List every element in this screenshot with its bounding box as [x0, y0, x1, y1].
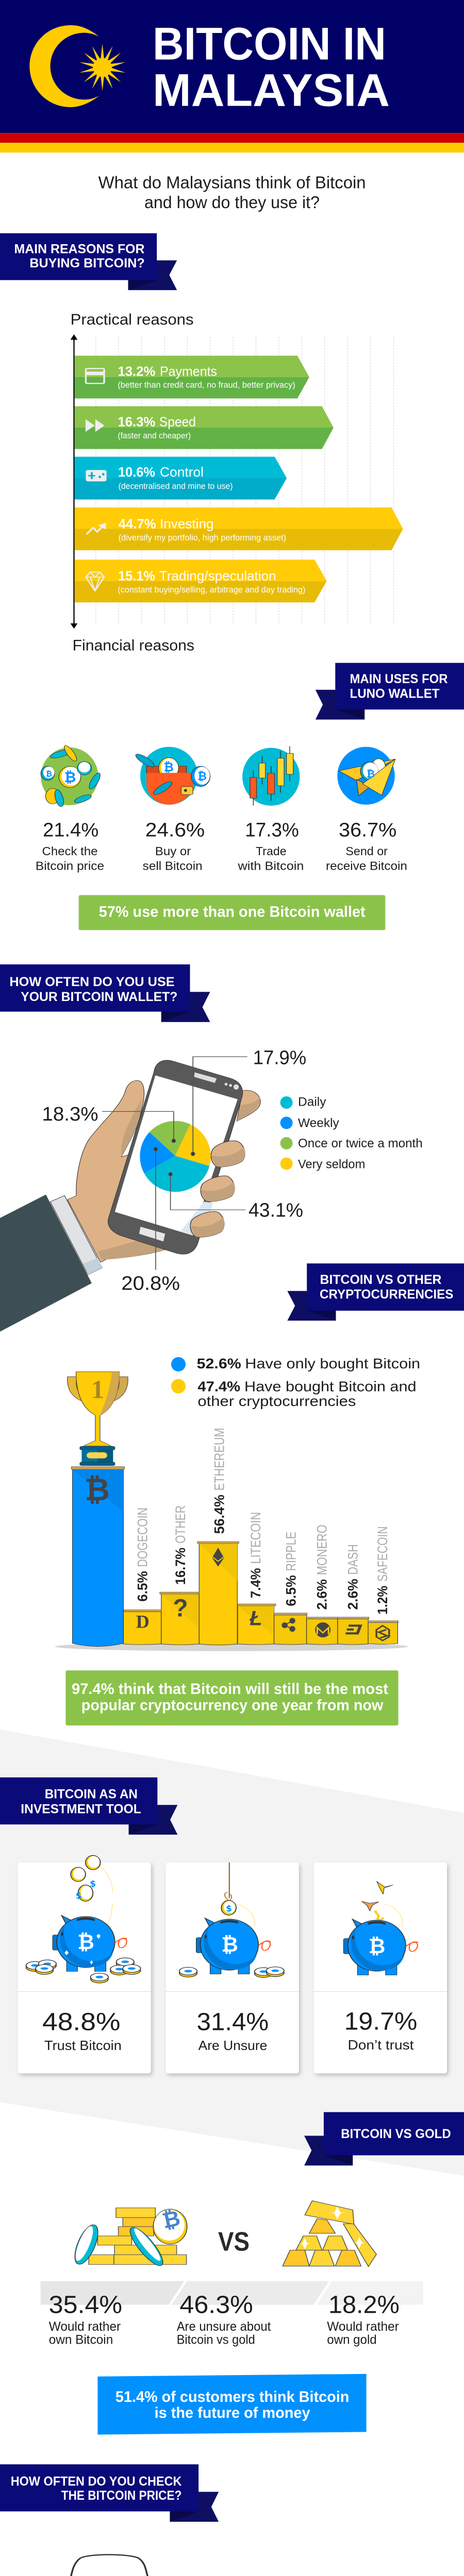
bar chart: coin podium: [55, 1467, 408, 1651]
legend: [280, 1095, 423, 1171]
column labels: [135, 1428, 390, 1615]
stat: 36.7% send or receive: receive Bitcoin: [326, 859, 407, 872]
legend: Have bought Bitcoin and: [244, 1379, 417, 1395]
stat: 18.2% gold: Would rather: [327, 2319, 399, 2334]
text: speed: 16.3%: [118, 414, 155, 430]
stat: 35.4% bitcoin: 35.4%: [49, 2292, 122, 2318]
pie chart: wallet frequency: [140, 1121, 211, 1192]
text: payments: 13.2%: [118, 364, 155, 379]
stat: 24.6% buy or sell: sell Bitcoin: [143, 859, 203, 872]
column labels: DOGECOIN: [135, 1507, 150, 1567]
callout: 97.4% most popular: popular cryptocurrency one year from now: [81, 1697, 384, 1714]
stat: 18.2% gold: 18.2%: [328, 2292, 400, 2318]
icon: fast forward: [86, 419, 105, 432]
value: 17.9%: 17.9%: [253, 1047, 306, 1069]
label: VS: VS: [218, 2227, 250, 2257]
stat: 36.7% send or receive: [326, 819, 407, 872]
column labels: 2.6%: [345, 1579, 360, 1609]
callout: 97.4% most popular: [65, 1670, 399, 1725]
text: speed: [118, 414, 196, 440]
illustration: gold bars and bitcoin coins: ₿: [160, 2205, 183, 2233]
text: payments: [118, 364, 295, 389]
icon: bitcoin symbol on bar: ₿: [85, 1472, 110, 1508]
stat: 46.3% unsure: Bitcoin vs gold: [177, 2333, 255, 2347]
icon: diamond: [86, 572, 104, 591]
icon: coins on green circle: ₿: [64, 769, 76, 786]
background bands: [41, 2281, 423, 2305]
section heading ribbon: price check: THE BITCOIN PRICE?: [61, 2488, 181, 2503]
stat: 24.6% buy or sell: 24.6%: [145, 819, 205, 841]
icon: wallet with coins: ₿: [163, 760, 174, 774]
icon: dogecoin symbol: D: [136, 1611, 150, 1632]
icon: trend arrow: [87, 523, 106, 534]
illustration: gold bars and bitcoin coins: [70, 2205, 187, 2268]
legend: Weekly: [298, 1116, 339, 1130]
icon: coins on green circle: [41, 744, 102, 807]
header banner: BITCOIN IN: [153, 18, 386, 69]
background: grey diagonal band: [0, 1730, 464, 2176]
card: trust bitcoin: ₿: [77, 1930, 94, 1954]
icon: candlestick chart: [242, 746, 300, 806]
section heading ribbon: price check: HOW OFTEN DO YOU CHECK: [11, 2474, 181, 2488]
text: investing: (diversify my portfolio, high performing asset): [119, 533, 286, 543]
section heading ribbon: wallet use: [0, 964, 210, 1022]
section heading ribbon: wallet use: YOUR BITCOIN WALLET?: [21, 990, 177, 1004]
icon: litecoin symbol: Ł: [249, 1607, 262, 1630]
stat: 17.3% trade: [237, 819, 304, 872]
stat: 21.4% check the price: [36, 819, 104, 872]
panel: main uses: [36, 744, 407, 930]
legend: Once or twice a month: [298, 1137, 423, 1150]
card: don't trust: ₿: [369, 1935, 385, 1958]
section heading ribbon: investment tool: BITCOIN AS AN: [45, 1787, 138, 1802]
stat: 24.6% buy or sell: Buy or: [155, 844, 191, 858]
legend: Have only bought Bitcoin: [245, 1355, 420, 1371]
legend: Daily: [298, 1095, 326, 1109]
legend: 52.6%: [197, 1355, 241, 1371]
section heading ribbon: vs other cryptocurrencies: CRYPTOCURRENCIES: [320, 1287, 453, 1302]
panel: bitcoin vs gold: [41, 2201, 423, 2435]
stat: 21.4% check the price: 21.4%: [43, 819, 98, 841]
text: trading: 15.1%: [118, 568, 155, 583]
card: are unsure: $: [226, 1904, 232, 1914]
stat: 18.2% gold: own gold: [327, 2333, 377, 2347]
column labels: LITECOIN: [248, 1512, 263, 1564]
section heading ribbon: vs other cryptocurrencies: BITCOIN VS OTHER: [320, 1273, 441, 1287]
card: don't trust: [313, 1862, 447, 2073]
icon: game controller: [86, 470, 107, 481]
text: payments: (better than credit card, no fraud, better privacy): [118, 380, 295, 389]
legend: 47.4%: [197, 1379, 240, 1395]
stat: 24.6% buy or sell: [143, 819, 205, 872]
panel: bitcoin vs other cryptocurrencies: [55, 1355, 420, 1725]
legend: [171, 1355, 420, 1409]
text: speed: (faster and cheaper): [118, 431, 191, 440]
section heading ribbon: bitcoin vs gold: [304, 2112, 464, 2165]
column labels: RIPPLE: [283, 1532, 299, 1571]
column labels: 7.4%: [248, 1568, 263, 1598]
icon: question mark: ?: [173, 1595, 188, 1622]
section heading ribbon: main reasons: MAIN REASONS FOR: [14, 242, 144, 257]
legend: Very seldom: [298, 1157, 365, 1171]
legend: other cryptocurrencies: [197, 1393, 356, 1409]
stat: 35.4% bitcoin: Would rather: [49, 2319, 121, 2334]
column labels: OTHER: [173, 1505, 188, 1544]
stat: 17.3% trade: with Bitcoin: [237, 859, 304, 872]
text: speed: Speed: [159, 414, 196, 430]
callout: 97.4% most popular: 97.4% think that Bitcoin will still be the most: [72, 1681, 388, 1698]
section heading ribbon: main uses: MAIN USES FOR: [350, 672, 448, 686]
value: 43.1%: 43.1%: [248, 1199, 303, 1221]
value: 20.8%: 20.8%: [121, 1273, 180, 1295]
icon: coins on green circle: ₿: [46, 769, 52, 778]
stat: 46.3% unsure: [177, 2292, 271, 2347]
stat: 36.7% send or receive: 36.7%: [339, 819, 396, 841]
stat: 17.3% trade: Trade: [256, 844, 287, 858]
text: trading: Trading/speculation: [159, 568, 276, 583]
icon: wallet with coins: ₿: [197, 770, 207, 783]
header banner: MALAYSIA: [153, 64, 390, 116]
stat: 35.4% bitcoin: [49, 2292, 122, 2347]
value: 18.3%: 18.3%: [42, 1104, 98, 1125]
stat: 21.4% check the price: Bitcoin price: [36, 859, 104, 872]
text: control: (decentralised and mine to use): [119, 481, 233, 491]
card: don't trust: 19.7%: [344, 2008, 417, 2035]
intro text: and how do they use it?: [144, 193, 320, 212]
callout: 57% more than one wallet: 57% use more than one Bitcoin wallet: [99, 904, 366, 921]
column labels: MONERO: [314, 1524, 330, 1575]
text: payments: Payments: [160, 364, 217, 379]
card: trust bitcoin: $: [76, 1891, 81, 1901]
leader lines: [102, 1057, 247, 1270]
panel: price check frequency: [29, 2555, 427, 2576]
callout: 51.4% future of money: [97, 2374, 367, 2435]
stat: 18.2% gold: [327, 2292, 400, 2347]
column labels: 16.7%: [173, 1548, 188, 1585]
callout: 51.4% future of money: 51.4% of customers think Bitcoin: [115, 2388, 349, 2405]
section heading ribbon: main reasons: [0, 233, 177, 290]
callout: 51.4% future of money: is the future of money: [155, 2404, 310, 2421]
stat: 46.3% unsure: 46.3%: [179, 2292, 253, 2318]
card: trust bitcoin: 48.8%: [42, 2009, 121, 2036]
icon: paper plane with coins: [337, 747, 395, 805]
text: investing: Investing: [160, 516, 213, 531]
callout: 57% more than one wallet: [79, 895, 385, 930]
text: trading: [118, 568, 305, 595]
column labels: 6.5%: [283, 1575, 299, 1606]
illustration: hand holding phone: [0, 1060, 260, 1332]
stat: 21.4% check the price: Check the: [42, 844, 98, 858]
card: are unsure: 31.4%: [197, 2009, 269, 2036]
intro text: [98, 173, 366, 212]
card: are unsure: ₿: [221, 1933, 238, 1957]
section heading ribbon: price check: [0, 2464, 219, 2522]
card: are unsure: Are Unsure: [198, 2038, 267, 2053]
card: trust bitcoin: $: [90, 1879, 96, 1889]
text: trading: (constant buying/selling, arbitrage and day trading): [118, 585, 305, 595]
card: don't trust: Don’t trust: [347, 2037, 414, 2053]
panel: wallet frequency: [0, 1047, 423, 1332]
icon: trophy: [68, 1372, 128, 1466]
section heading ribbon: vs other cryptocurrencies: [287, 1263, 464, 1320]
text: investing: [119, 516, 286, 543]
illustration: gold bars: [283, 2201, 376, 2266]
chart: axis and arrow bars: [71, 334, 403, 629]
illustration: alarm clock with pie chart: [29, 2555, 181, 2576]
panel: trust cards: [18, 1855, 447, 2073]
label: financial reasons: Financial reasons: [73, 637, 194, 654]
icon: paper plane with coins: ₿: [367, 768, 375, 780]
column labels: 1.2%: [375, 1586, 390, 1615]
column labels: SAFECOIN: [375, 1526, 390, 1582]
card: trust bitcoin: Trust Bitcoin: [44, 2038, 122, 2053]
text: control: [118, 464, 233, 491]
column labels: DASH: [345, 1544, 360, 1574]
section heading ribbon: main uses: [316, 663, 464, 720]
column labels: 56.4%: [211, 1495, 227, 1534]
card: trust bitcoin: [18, 1855, 151, 2073]
section heading ribbon: wallet use: HOW OFTEN DO YOU USE: [9, 975, 175, 989]
stat: 17.3% trade: 17.3%: [245, 819, 299, 841]
text: control: 10.6%: [118, 464, 155, 480]
icon: trophy: 1: [91, 1375, 104, 1403]
section heading ribbon: main uses: LUNO WALLET: [350, 687, 439, 701]
text: control: Control: [160, 464, 204, 480]
intro text: What do Malaysians think of Bitcoin: [98, 173, 366, 192]
section heading ribbon: investment tool: INVESTMENT TOOL: [21, 1802, 141, 1817]
column labels: 2.6%: [314, 1579, 330, 1609]
label: practical reasons: Practical reasons: [71, 311, 194, 328]
icon: credit card: [86, 368, 104, 383]
stat: 36.7% send or receive: Send or: [345, 844, 388, 858]
icon: wallet with coins: [134, 747, 210, 805]
header banner: [0, 0, 464, 152]
panel: reasons bar chart: [71, 311, 403, 654]
section heading ribbon: investment tool: [0, 1777, 177, 1835]
stat: 35.4% bitcoin: own Bitcoin: [49, 2333, 113, 2347]
column labels: 6.5%: [135, 1571, 150, 1602]
stat: 46.3% unsure: Are unsure about: [177, 2319, 271, 2334]
column labels: ETHEREUM: [211, 1428, 227, 1490]
section heading ribbon: main reasons: BUYING BITCOIN?: [29, 256, 145, 270]
section heading ribbon: bitcoin vs gold: BITCOIN VS GOLD: [341, 2127, 451, 2141]
text: investing: 44.7%: [119, 516, 156, 531]
card: are unsure: [165, 1862, 299, 2073]
